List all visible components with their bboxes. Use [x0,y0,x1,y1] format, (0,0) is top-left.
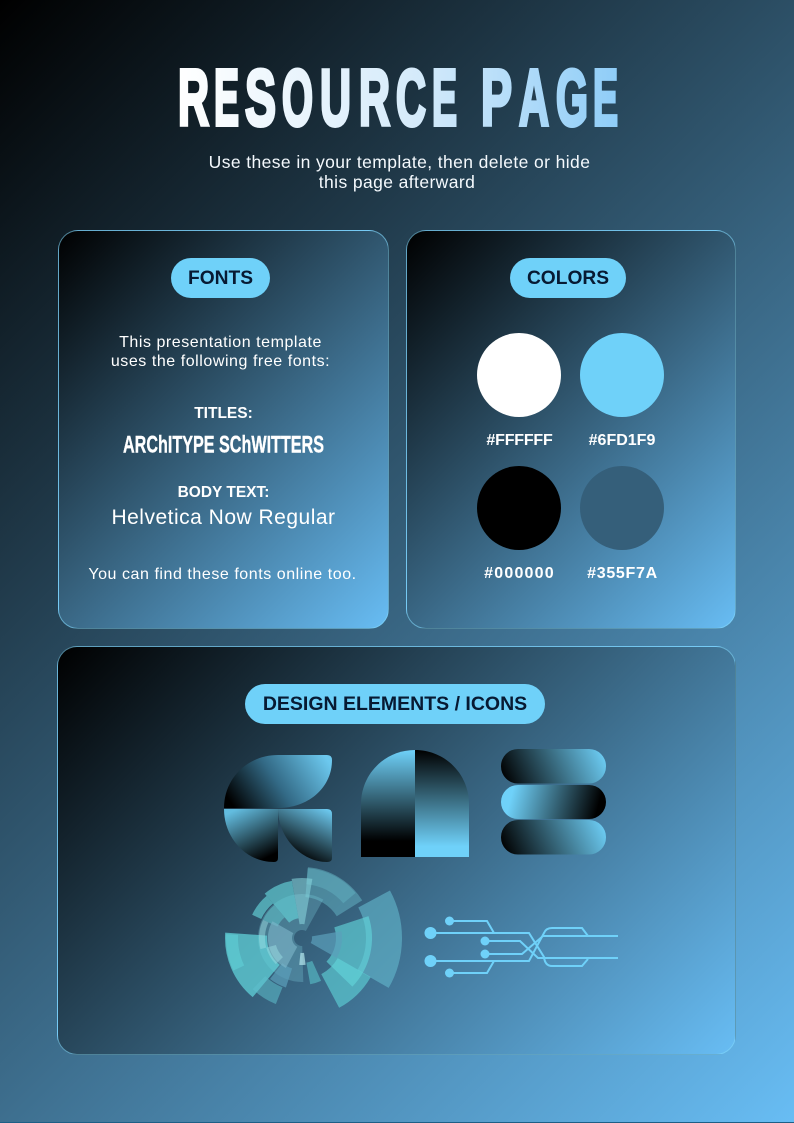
title: E [432,53,457,142]
panel: fonts [58,230,389,629]
heading: design elements [245,684,545,724]
title: O [282,53,313,142]
swatch: white [477,333,561,417]
panel: colors [406,230,736,629]
icon: split arch [361,750,469,857]
title: G [556,53,588,142]
title: A [519,53,549,142]
label: black: #000000 [484,565,555,582]
subtitle [209,152,590,192]
heading: colors: COLORS [527,268,609,289]
icon: radial segments [191,827,413,1049]
title: R [178,53,209,142]
label: titles: TITLES: [194,405,253,422]
icon: rounded R shape [224,755,332,862]
text: intro [111,334,330,370]
title: E [214,53,239,142]
title: S [245,53,276,142]
icon: stacked pills [501,749,606,854]
icon: circuit lines [424,916,618,978]
subtitle: this page afterward [319,172,475,192]
heading: fonts [171,258,270,298]
title: P [481,53,512,142]
title: U [320,53,351,142]
text: closing note: You can find these fonts online too. [88,566,357,583]
label: light blue: #6FD1F9 [589,432,655,449]
swatch: black [477,466,561,550]
subtitle: Use these in your template, then delete or hide [209,152,590,172]
swatch: light blue [580,333,664,417]
label: body text: BODY TEXT: [178,484,269,501]
text: intro: This presentation template [119,334,322,351]
text: intro: uses the following free fonts: [111,353,330,370]
heading: fonts: FONTS [188,268,253,289]
label: slate blue: #355F7A [587,565,658,582]
heading: colors [510,258,626,298]
title: R [359,53,390,142]
title [178,53,618,142]
swatch: slate blue [580,466,664,550]
label: white: #FFFFFF [486,432,553,449]
body font sample: Helvetica Now Regular [111,506,336,528]
title: E [593,53,618,142]
panel: design elements [57,646,736,1055]
heading: design elements: DESIGN ELEMENTS / ICONS [263,693,527,715]
title font sample: ARChITYPE SChWITTERS [123,432,324,458]
title: C [396,53,426,142]
